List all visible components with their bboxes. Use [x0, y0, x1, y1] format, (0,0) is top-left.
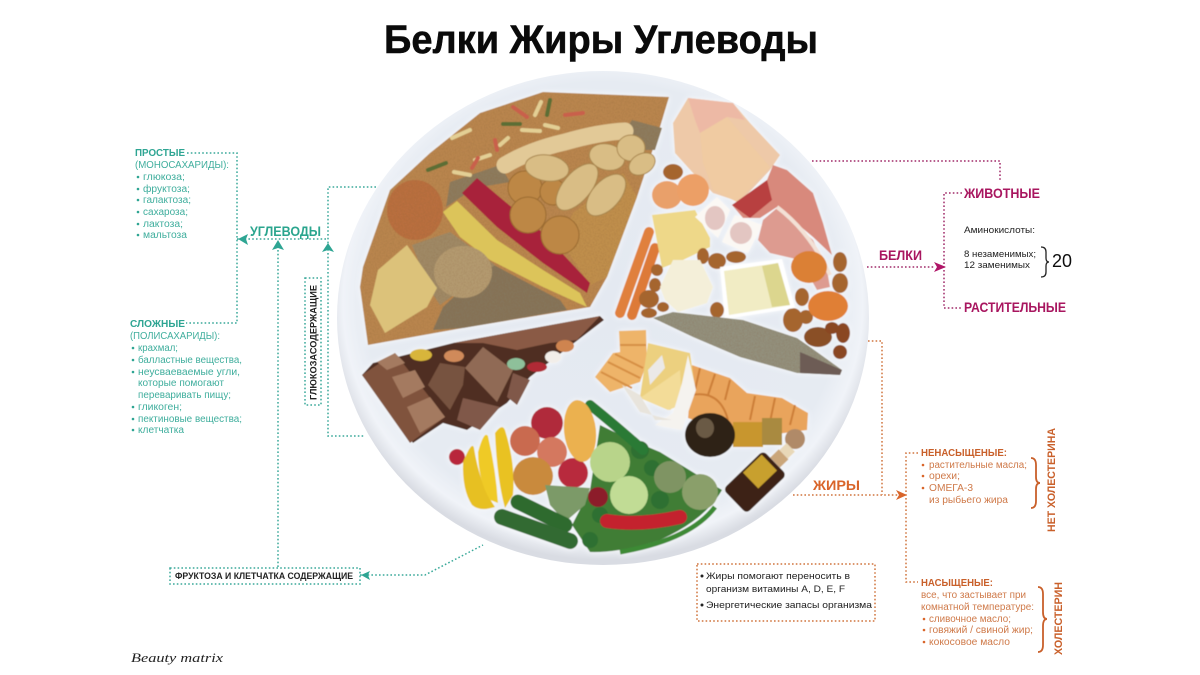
arrow: left to fructose box: [361, 571, 370, 580]
green onion: [620, 507, 715, 552]
text block: complex carbs: пектиновые вещества;: [138, 414, 242, 425]
brace: no cholesterol: [1031, 458, 1040, 508]
chocolate base: [362, 316, 604, 443]
label box: fructose and fibre: ФРУКТОЗА И КЛЕТЧАТКА СОДЕРЖАЩИЕ: [175, 571, 353, 581]
text block: unsaturated: орехи;: [929, 471, 960, 482]
octagon pack: [660, 260, 713, 312]
cabbage: [590, 442, 630, 482]
butter tub: [720, 259, 795, 319]
muffin: [387, 180, 443, 240]
fats callout: [697, 341, 1065, 655]
plate: [337, 71, 869, 565]
carrots: [620, 232, 649, 313]
text block: complex carbs: гликоген;: [138, 402, 182, 413]
text block: complex carbs: СЛОЖНЫЕ: [130, 318, 185, 330]
yellow pasta: [443, 201, 587, 307]
arrow: fats: [896, 490, 907, 500]
bananas: [463, 446, 495, 509]
heading: animal: ЖИВОТНЫЕ: [963, 185, 1040, 201]
note box: role of fats: Жиры помогают переносить в: [706, 571, 850, 582]
leaf clumps: [582, 441, 669, 548]
text block: saturated: говяжий / свиной жир;: [929, 625, 1033, 636]
plate with food: [337, 71, 869, 565]
vertical label: cholesterol: ХОЛЕСТЕРИН: [1053, 582, 1065, 655]
text block: complex carbs: переваривать пищу;: [138, 390, 231, 401]
text block: complex carbs: балластные вещества,: [138, 354, 242, 366]
text block: simple carbs: галактоза;: [143, 195, 191, 206]
leaves base: [572, 425, 722, 552]
text block: simple carbs: мальтоза: [143, 230, 187, 241]
text block: saturated: [921, 577, 1034, 648]
text block: saturated: НАСЫЩЕНЫЕ:: [921, 577, 993, 589]
left crackers: [595, 330, 647, 392]
penne: [428, 100, 583, 175]
text block: unsaturated: из рыбьего жира: [929, 494, 1008, 506]
carbohydrates callout: [130, 147, 483, 584]
eggs: [652, 181, 682, 209]
artichokes: [654, 461, 686, 493]
text block: complex carbs: [130, 318, 242, 436]
pineapple: [513, 457, 553, 495]
food wedge: fats: [595, 330, 808, 514]
arrow: up to carbohydrates: [272, 240, 284, 250]
chocolate cubes: [465, 347, 513, 402]
note box: role of fats: Энергетические запасы организма: [706, 600, 873, 611]
text block: unsaturated: растительные масла;: [929, 460, 1027, 471]
berries: [449, 449, 465, 465]
cherry: [588, 487, 608, 507]
food wedge: chocolate: [362, 316, 604, 443]
heading: carbohydrates: УГЛЕВОДЫ: [250, 223, 321, 239]
text block: simple carbs: глюкоза;: [143, 172, 185, 183]
text block: unsaturated: НЕНАСЫЩЕНЫЕ:: [921, 447, 1007, 459]
text block: saturated: сливочное масло;: [929, 614, 1011, 625]
wafer strip: [453, 316, 600, 350]
chicken: [673, 98, 780, 202]
chocolate bar: [362, 353, 445, 443]
apples: [531, 407, 563, 439]
text block: complex carbs: которые помогают: [138, 378, 224, 389]
label box: fructose and fibre: [170, 568, 360, 584]
text block: simple carbs: (МОНОСАХАРИДЫ):: [135, 160, 229, 171]
heading: proteins: БЕЛКИ: [879, 247, 922, 263]
seeded cookie: [434, 246, 492, 298]
text block: simple carbs: лактоза;: [143, 219, 183, 230]
heading: fats: ЖИРЫ: [812, 477, 860, 493]
label box: glucose-containing: ГЛЮКОЗАСОДЕРЖАЩИЕ: [308, 285, 320, 400]
cookies: [508, 171, 579, 254]
text block: complex carbs: (ПОЛИСАХАРИДЫ):: [130, 331, 220, 342]
food wedge: carbohydrates: [360, 92, 669, 345]
grain base: [360, 92, 669, 345]
yoghurt cups: [695, 197, 762, 253]
arrow: up glucose: [322, 243, 334, 252]
amino acids text: [964, 225, 1072, 277]
text block: saturated: кокосовое масло: [929, 637, 1010, 648]
sausage: [505, 131, 625, 165]
paper: [655, 355, 696, 430]
text block: saturated: комнатной температуре:: [921, 602, 1034, 613]
food wedge: proteins: [620, 98, 850, 375]
amino acids text: Аминокислоты:: [964, 225, 1035, 236]
note box: role of fats: организм витамины A, D, E, F: [706, 584, 845, 595]
fish: [653, 312, 842, 375]
red pepper: [607, 517, 680, 523]
text block: simple carbs: [135, 147, 229, 241]
text block: simple carbs: ПРОСТЫЕ: [135, 147, 185, 159]
oil bottle: [685, 413, 805, 457]
candies: [410, 349, 432, 361]
cracker: [370, 245, 437, 333]
mango: [561, 398, 599, 464]
noodles: [560, 173, 637, 285]
text block: complex carbs: неусваеваемые угли,: [138, 367, 240, 378]
oil bottle small: [723, 435, 803, 514]
amino acids text: 20: [1052, 251, 1072, 271]
label box: glucose-containing: [305, 278, 321, 405]
vertical label: no cholesterol: НЕТ ХОЛЕСТЕРИНА: [1046, 428, 1058, 532]
beans: [590, 405, 643, 450]
connector lines: proteins: [812, 161, 1000, 308]
meat: [732, 165, 832, 255]
red pasta: [462, 178, 590, 293]
brace: cholesterol: [1038, 587, 1047, 652]
text block: simple carbs: сахароза;: [143, 207, 188, 218]
butter: [640, 343, 695, 410]
title: Белки Жиры Углеводы: [384, 18, 818, 62]
dark grain: [446, 120, 662, 207]
food wedge: fruit and vegetables: [449, 398, 722, 552]
amino acids text: 8 незаменимых;: [964, 249, 1036, 260]
heading: plant: РАСТИТЕЛЬНЫЕ: [964, 299, 1066, 315]
signature: Beauty matrix: [131, 650, 223, 665]
potatoes: [523, 135, 659, 223]
wild rice: [433, 263, 567, 330]
connector lines: carbohydrates: [186, 153, 483, 575]
orange fruits: [791, 251, 827, 283]
note box: role of fats: [697, 564, 875, 621]
connector lines: fats: [793, 341, 918, 582]
text block: simple carbs: фруктоза;: [143, 183, 190, 195]
right crackers: [688, 365, 808, 435]
arrow: left to types: [238, 234, 248, 245]
proteins callout: [812, 161, 1072, 315]
text block: unsaturated: ОМЕГА-3: [929, 483, 973, 494]
text block: saturated: все, что застывает при: [921, 590, 1026, 601]
amino acids text: 12 заменимых: [964, 260, 1030, 271]
cheese: [652, 210, 710, 268]
text block: unsaturated: [921, 447, 1027, 506]
nuts: [639, 164, 850, 359]
text block: complex carbs: клетчатка: [138, 425, 184, 436]
cucumbers: [518, 502, 565, 525]
text block: complex carbs: крахмал;: [138, 343, 178, 354]
arrow: proteins: [934, 262, 946, 272]
